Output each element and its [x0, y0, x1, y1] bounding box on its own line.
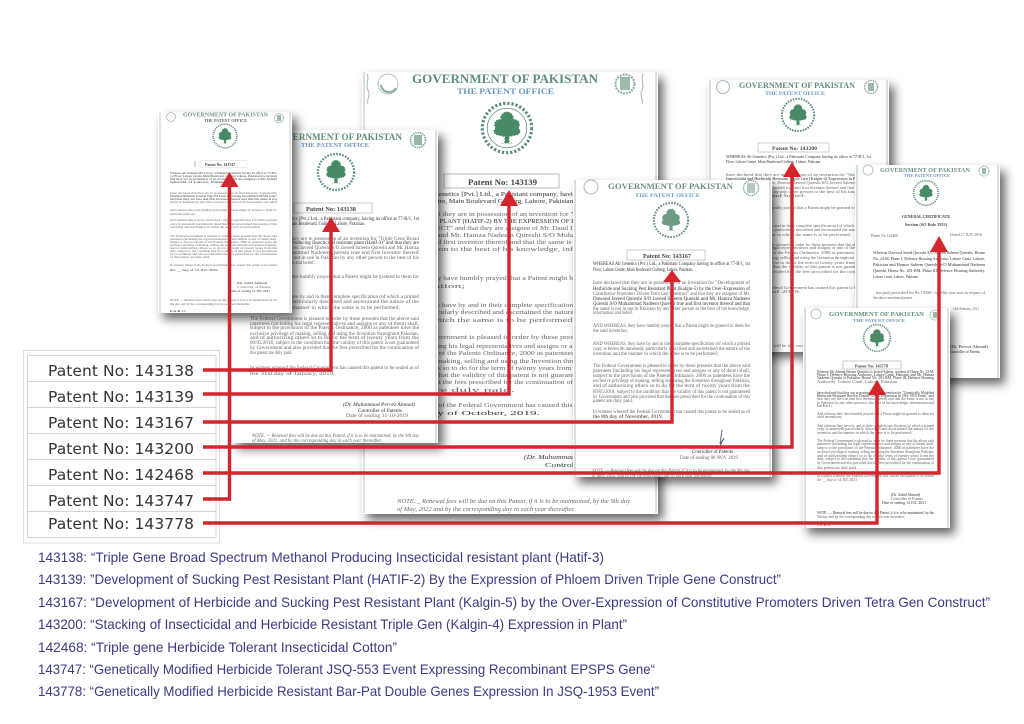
patent document 142468	[855, 165, 1000, 378]
patent number box: Patent No: 143167	[643, 254, 691, 260]
body text: PEST RESISTANT PLANT (HATIF-2) BY THE EXPRESSION OF PHLOEM DRIVEN TRIPLE	[385, 218, 650, 225]
crest and shield ornaments	[863, 165, 989, 176]
title: 143138: 143138: “Triple Gene Broad Spectrum Methanol Producing Insecticidal resistant plant (Hatif-3)	[38, 549, 604, 565]
body text	[725, 154, 872, 349]
body text: NOTE. — Renewal fees will be due on this Patent, if it is to be maintained, by the	[817, 511, 934, 516]
body text: have declared that they are in possession of an invention for "Development of	[593, 281, 750, 286]
body text: of May, 2022, and by the corresponding day in each year thereafter.	[252, 439, 382, 444]
arrow: 143747 to document	[203, 172, 238, 499]
body text: 14th February, 2021	[953, 306, 979, 312]
body text: Whereas Mr. Ahmad Saleem Qureshi s/o Javeed Saleem, resident of House No. 24-M,	[817, 370, 934, 375]
body text: of May, 2022 and by the corresponding day in each year thereafter.	[397, 506, 575, 513]
body text: And whereas they have humbly prayed that a Patent might be granted to them for	[170, 208, 278, 212]
title: 143778: 143778: “Genetically Modified Herbicide Resistant Bar-Pat Double Genes Expression In JSQ-1953 Event”	[38, 683, 659, 699]
emblem	[654, 203, 688, 237]
emblem	[482, 103, 532, 153]
body text: is annexed) particularly described and ascertained the nature of the invention and the	[385, 309, 650, 316]
body text: and that the same is not in use in Pakistan by any other person to the best of his	[250, 256, 419, 261]
body text: assignee of Mr. Dawood Javeed Qureshi S/O Javeed Saleem Qureshi and Mr. Hamza	[250, 246, 420, 251]
body text: And whereas they have by and in their complete specification (of which a printed	[250, 295, 420, 300]
body text: Controller of Patents	[545, 462, 626, 469]
body text: by Government and also provided that the fees prescribed for the continuation of	[817, 461, 935, 465]
body text: (Dr. Zahid Ahmad)	[237, 281, 268, 285]
body text: patentees (including his legal representatives and assigns or any of them) shall,	[250, 322, 419, 327]
body text: of this patent are duly paid.	[170, 255, 210, 259]
heading: GOVERNMENT OF PAKISTAN	[739, 81, 855, 90]
arrow: 142468 to document	[203, 236, 948, 473]
body text: the __ day of 14 JUL 2021	[170, 268, 218, 272]
heading: GOVERNMENT OF PAKISTAN	[829, 311, 924, 318]
body text: And whereas they have by and in their complete specification (of which a printed	[817, 424, 934, 428]
body text: also provided that the fees prescribed for the continuation of this patent are duly paid	[385, 379, 651, 386]
title: 142468: 142468: “Triple gene Herbicide Tolerant Insecticidal Cotton”	[38, 639, 397, 655]
body text: patent are duly paid.	[593, 399, 633, 404]
body text: NOTE. — Renewal fees will be due on this Patent, if it is to be maintained, by the 9th day	[591, 469, 751, 474]
certificate heading: GENERAL CERTIFICATE	[902, 214, 950, 219]
body text: in Pakistan by any other person to the best of his knowledge, information and	[817, 401, 934, 406]
arrow: 143200 to document	[203, 162, 801, 447]
body text: Date of sealing 14 JUL 2021	[882, 501, 926, 505]
patent number box: Patent No: 143139	[468, 177, 538, 187]
title: 143167: 143167: “Development of Herbicide and Sucking Pest Resistant Plant (Kalgin-5) by the Over-Expression of Constitutive Promoters Driven Tetra Gen Construct”	[38, 594, 990, 610]
body text: copy is herewith annexed), particularly described and ascertained the nature of the	[726, 227, 871, 233]
body text: subject to the provisions of the Patents Ordinance, 2000 as patentees have the	[593, 374, 750, 379]
body text	[385, 191, 651, 513]
body text: Dawood Javeed Qureshi S/O Javeed Saleem Qureshi and Mr. Hamza Nadeem	[593, 297, 750, 302]
body text: And whereas they have by and in their complete specification (of which a printed	[170, 218, 277, 222]
body text: Lahore Cantt, Lahore, Pakistan	[873, 274, 919, 280]
title: 143747: 143747: “Genetically Modified Herbicide Tolerant JSQ-553 Event Expressing Recombinant EPSPS Gene“	[38, 661, 655, 677]
body text: information and belief.	[593, 311, 633, 316]
body text: invention and the manner in which the same is to be performed;	[726, 232, 851, 237]
title: 143139: 143139: ”Development of Sucking Pest Resistant Plant (HATIF-2) By the Expression of Phloem Driven Triple Gene Construct”	[38, 571, 781, 587]
body text: WHEREAS Ali Genetics [Pvt.] Ltd., a Pakistani company, having its office at 77-B/1, 1st	[385, 191, 650, 198]
body text: and privilege of making, selling and using the Invention throughout Pakistan, and of	[385, 358, 651, 365]
body text: P.A.R.11	[817, 523, 831, 527]
body text: And whereas they have humbly prayed that a Patent might be granted to them for	[250, 275, 419, 280]
body text: WHEREAS Ali Genetics (Pvt.) Ltd., a Pakistani Company having its office at 77-B/1, 1st	[593, 262, 751, 267]
body text: by Government and also provided that the fees prescribed for the continuation of this	[593, 395, 750, 400]
body text: Floor, Lahore Centre, Main Boulevard, Gulberg, Lahore, Pakistan.	[250, 222, 365, 227]
body text: and that they are true and first inventor thereof and that the same is not	[170, 197, 277, 201]
body text: The Federal Government is pleased to order by these presents that the above said	[250, 317, 420, 322]
body text: Controller of Patents	[692, 450, 733, 455]
body text: The Federal Government is pleased to order by these presents that the above said	[385, 334, 651, 341]
certificate heading	[902, 214, 950, 227]
body text: In witness whereof the Federal Government has caused this patent to be sealed	[170, 263, 277, 267]
body text: to the condition that the validity of this patent is not guaranteed by Government and	[385, 372, 651, 379]
body text: patentees (including his legal representatives and assigns or any of them) shall,	[593, 369, 750, 374]
body text: have declared that they are in possession of an invention for "Genetically Modified	[817, 391, 934, 395]
body text: Controller of Patents	[358, 409, 402, 414]
body text: the above-mentioned patent.	[873, 295, 913, 300]
body text: any other person to the best of his knowledge, information and belief.	[385, 246, 650, 253]
crest and shield ornaments	[716, 80, 878, 94]
body text: The Federal Government is pleased to order by these presents that the above said	[817, 439, 934, 443]
body text: have declared that they are in possession of an invention for "Development of Sucking	[385, 211, 651, 218]
emblem	[914, 181, 938, 205]
patent number table	[24, 350, 220, 543]
body text: In witness whereof the Federal Government has caused this patent to be sealed as of	[250, 366, 419, 371]
office name: THE PATENT OFFICE	[457, 87, 554, 96]
table row: 143167: Patent No: 143167	[48, 414, 194, 432]
emblem	[213, 124, 237, 148]
body text: AND WHEREAS, they have humbly prayed that a Patent might be granted to them for	[593, 324, 750, 329]
patent number box	[758, 143, 829, 152]
body text: date, subject to the condition that the validity of this patent is not guaranteed	[817, 457, 934, 462]
body text: And whereas they have humbly prayed that a Patent might be granted to them for	[817, 412, 935, 416]
table row: 142468: Patent No: 142468	[48, 466, 194, 484]
body text: Floor, Lahore Centre, Main Boulevard Gulberg, Lahore, Pakistan.	[726, 159, 821, 165]
body text: authorizing others so to do for the term of twenty years from the date of filing, subject	[385, 365, 650, 372]
heading: GOVERNMENT OF PAKISTAN	[412, 72, 599, 86]
patent document 143138	[232, 130, 438, 444]
body text: have declared that they are in possession of an invention for "Genetically	[170, 191, 277, 195]
office name: THE PATENT OFFICE	[301, 143, 369, 149]
body text: And whereas they have by and in their complete specification (of which a printed copy	[385, 302, 651, 309]
patent number box	[627, 250, 705, 260]
heading: GOVERNMENT OF PAKISTAN	[183, 112, 269, 118]
table row: 143747: Patent No: 143747	[48, 492, 194, 510]
body text: And whereas they have humbly prayed that a Patent might be granted to them for	[726, 205, 872, 210]
body text	[170, 171, 278, 313]
body text: exclusive privilege of making, selling and using the Invention throughout Pakistan,	[726, 255, 871, 261]
body text: the same is not in use in Pakistan by any other person to the best of his knowledge,	[593, 307, 750, 312]
body text: and of authorizing others so to do for the term of twenty years from the date	[726, 260, 871, 265]
body text: patentees (including his legal representatives and assigns or any of them) shall,	[726, 245, 871, 251]
table row: 143138: Patent No: 143138	[48, 362, 194, 380]
body text: the said invention;	[593, 329, 628, 334]
heading: GOVERNMENT OF PAKISTAN	[272, 132, 402, 142]
body text: In witness whereof the Federal Government has caused this patent to be sealed	[726, 285, 872, 290]
body text: and of authorizing others so to do for the term of twenty years from the	[817, 454, 934, 458]
body text: 09/05/2018, subject to the condition that the validity of this patent is not guaranteed	[250, 341, 420, 346]
body text: the 8th day of November, 2019.	[593, 415, 663, 420]
body text: the __ day of 14 JUL 2021	[817, 478, 857, 482]
body text: Nadeem S/O Muhammad Nadeem Qureshi true and first inventor thereof	[250, 251, 419, 256]
body text: that they are the true and first inventor thereof and that the same is not in use	[817, 397, 934, 401]
body text: Saleem Qureshi and Mr. Hamza Nadeem Qureshi S/O Muhammad Nadeem Qureshi	[385, 232, 650, 239]
body text: 09/05/2018, subject to the condition that the validity of this patent is not guaranteed	[593, 390, 751, 395]
body text: invention and the manner in which the same is to be performed;	[250, 306, 400, 311]
body text: (Dr. Muhammad Pervez Ahmad)	[343, 403, 415, 408]
body text: Pakistan and Hamza Saleem Qureshi S/O Muhammad Nadeem	[873, 262, 986, 267]
body text: (Dr. Zahid Ahmad)	[891, 493, 921, 497]
body text: 1st Floor, Lahore Centre, Main Boulevard, Gulberg, Lahore, Pakistan have declared	[170, 174, 277, 179]
body text: of May, 2022, and by the corresponding day in each year thereafter.	[592, 474, 712, 479]
body text: The Federal Government is pleased to order by these presents that the above said	[170, 234, 277, 238]
arrow: 143778 to document	[203, 380, 886, 523]
body text: said invention;	[385, 283, 465, 290]
body text: And whereas they have humbly prayed that a Patent might be granted to them for the	[385, 275, 650, 282]
body text: the 8th day of October, 2019.	[385, 410, 541, 417]
heading: GOVERNMENT OF PAKISTAN	[880, 167, 971, 174]
body text: information and belief.	[726, 193, 806, 198]
body text: that they are assignee of Mr. Dawood Javeed Qureshi S/O Javeed Saleem Qureshi	[726, 180, 872, 185]
office name: THE PATENT OFFICE	[765, 91, 826, 97]
body text: WHEREAS Ali Genetics (Pvt.) Ltd., a Pakistani company, having its office at 77-B/1, 1st	[250, 217, 420, 222]
body text: exclusive privilege of making, selling and using the Invention throughout Pakistan,	[817, 450, 934, 455]
patent number box: Patent No: 143747	[205, 162, 235, 167]
office name: THE PATENT OFFICE	[904, 173, 950, 178]
body text: this patent are duly paid.	[817, 466, 857, 470]
body text: Nadeem Qureshi of Pakistan, House No. 281-RM, Phase III, Defence Housing	[817, 376, 934, 381]
patent number box	[843, 361, 901, 369]
body text: subject to the condition that the validity of this patent is not guaranteed by	[726, 264, 872, 269]
body text: Controller of Patents	[950, 349, 980, 354]
patent document 143200	[708, 80, 889, 352]
body text	[873, 250, 989, 354]
body text	[250, 217, 420, 444]
body text: Have declared that they are in possession of an invention for "Triple Gene Broad	[250, 237, 420, 242]
patent number box	[195, 160, 247, 168]
body text: copy is annexed) particularly described and ascertained the nature of the	[250, 300, 420, 305]
office name: THE PATENT OFFICE	[853, 318, 905, 323]
body text: Modified Herbicide Tolerant JSQ-553 Event Expressing Recombinant EPSPS Gene"	[170, 194, 278, 198]
body text: exclusive privilege of making, selling and using the Invention throughout Pakistan,	[593, 379, 750, 384]
emblem	[318, 154, 354, 190]
body text: NOTE. — Renewal fees will be due on this Patent, if it is to be maintained, by the 9th day	[251, 434, 420, 439]
table row: 143139: Patent No: 143139	[48, 388, 194, 406]
body text: invention and the manner in which the same is to be performed;	[817, 431, 912, 435]
body text: Herbicide and Sucking Pest Resistant Plant (Kalgin-5) by the Over-Expression of	[593, 287, 750, 292]
body text: exclusive privilege of making, selling and using the Invention throughout Pakistan,	[170, 243, 277, 248]
body text: Floor, Lahore Centre, Main Boulevard Gulberg, Lahore, Pakistan.	[593, 268, 693, 273]
body text: this patent are duly paid.	[250, 351, 292, 356]
body text: subject to the provisions of the Patents Ordinance, 2000 as patentees have the	[170, 240, 277, 245]
body text: invention and the manner in which the same is to be performed;	[593, 352, 718, 357]
body text: (Dr. Pervez Ahmad)	[950, 344, 989, 349]
body text: have declared that they are in possession of an invention for "Stacking of	[726, 172, 872, 177]
patent title list	[38, 549, 990, 699]
body text: Controller of Patents	[891, 497, 924, 501]
emblem	[864, 325, 890, 351]
body text: Qureshi S/O Muhammad Nadeem Qureshi true and first inventor thereof and that	[593, 302, 751, 307]
body text: The Federal Government is pleased to order by these presents that the above said	[593, 364, 751, 369]
body text: by Government and also provided that the fees prescribed for the continuation	[170, 252, 277, 256]
heading: GOVERNMENT OF PAKISTAN	[608, 181, 734, 191]
body text: said invention;	[170, 212, 195, 216]
body text: patentees (including his legal representatives and assigns or any of them) shall,	[170, 237, 277, 242]
patent number line: Patent No 142468	[871, 233, 899, 238]
body text: the 31st day of January, 2019.	[250, 372, 335, 377]
body text: Herbicide Resistant Bar-Pat Double Genes Expression In JSQ-1953 Event" and	[817, 394, 934, 398]
body text: patentees (including his legal representatives and assigns or any of them) shall, subject	[385, 343, 650, 350]
body text: NOTE. _ Renewal fees will be due on this Patent, if it is to be maintained, by the 9th day	[396, 498, 630, 505]
body text: invention and the manner in which the same is to be performed;	[170, 225, 260, 229]
body text: Controller of Patents	[237, 285, 272, 289]
patent document 143139	[362, 72, 658, 514]
patent number box: Patent No: 143138	[306, 206, 356, 213]
patent number line	[871, 232, 983, 238]
certificate heading: Section (SO Rule 1933)	[905, 222, 948, 227]
body text: subject to the provisions of the Patents Ordinance, 2000 as patentees have the	[726, 250, 871, 256]
body text: In witness whereof the Federal Government has caused this patent to be sealed as of	[593, 410, 750, 415]
body text: AND WHEREAS, they have by and in their complete specification (of which a printed	[593, 342, 751, 347]
body text	[817, 370, 935, 527]
patent number line: Dated 27 JUN 2016	[950, 232, 983, 237]
table row: 143778: Patent No: 143778	[48, 515, 194, 533]
crest and shield ornaments	[811, 309, 940, 320]
body text: subject to the provisions of the Patents Ordinance, 2000 as patentees have the	[250, 326, 420, 331]
body text: The Federal Government is pleased to order by these presents that the above said	[726, 242, 872, 247]
body text: said invention;	[817, 415, 842, 419]
body text: their first true and first inventor thereof and that the same is not in use in Pakistan by	[385, 239, 651, 246]
body text: copy is herewith annexed), particularly described and ascertained the nature of the	[593, 347, 750, 352]
body text: Qureshi, House No. 281-RM, Phase III, Defence Housing Authority,	[873, 268, 985, 274]
body text: as of the day of 2019.	[726, 289, 801, 294]
table row: 143200: Patent No: 143200	[48, 440, 194, 458]
body text: No. 24-M, Phase I, Defence Housing Authority, Lahore Cantt, Lahore,	[873, 256, 985, 262]
body text: to the provisions of the Patents Ordinance, 2000 as patentees have the exclusive right	[385, 350, 650, 357]
body text: Constitutive Promoters Driven Tetra Gen Construct" and that they are assignee of Mr.	[593, 292, 750, 297]
body text: Phase I, Defence Housing Authority, Lahore Cantt, Pakistan, and Mr. Hamza	[817, 373, 934, 378]
body text: manner in which the same is to be performed.	[385, 317, 576, 324]
body text: exclusive privilege of making, selling and using the Invention throughout Pakistan,	[250, 332, 419, 337]
emblem	[782, 99, 814, 131]
body text: and of authorizing others so to do for the term of twenty years from the	[593, 384, 750, 389]
body text: Whereas Dawood Javed Qureshi S/O Javeed Saleem Qureshi, House	[873, 250, 985, 256]
body text: patent are duly paid.	[385, 387, 516, 394]
patent document 143747	[158, 112, 292, 313]
body text: that they are in possession of an invention and are assignee of Mr. Ahmad	[170, 177, 277, 181]
arrow: 143138 to document	[203, 217, 340, 370]
body text: Date of sealing 31-10-2019	[346, 414, 409, 419]
body text: knowledge, information and belief;	[250, 261, 315, 266]
body text: is not in use in Pakistan by any other person to the best of his knowledge,	[726, 189, 871, 195]
body text: belief;	[817, 404, 832, 408]
body text: Whereas Ali Genetics (Pvt.) Ltd., a Pakistani company having its office at 77-B/1,	[170, 171, 277, 176]
body text: patentees (including his legal representatives and assigns or any of them) shall,	[817, 442, 934, 447]
body text: and of authorizing others so to do for the term of twenty years from the	[250, 336, 420, 341]
shield ornament	[410, 132, 426, 148]
body text: NOTE. — Renewal fees will be due on this Patent, if it is to be maintained, by the	[170, 298, 277, 303]
title: 143200: 143200: “Stacking of Insecticidal and Herbicide Resistant Triple Gen (Kalgin-4) Expression in Plant”	[38, 616, 627, 632]
crest and shield ornaments	[584, 180, 758, 196]
body text: and Mr. Hamza Nadeem Qureshi true and first inventor thereof and that the same	[726, 185, 871, 190]
body text: In witness whereof the Federal Government has caused this patent to be sealed	[817, 474, 934, 478]
body text: copy is annexed) particularly described and ascertained the nature of the	[817, 427, 934, 431]
patent document 143167	[573, 180, 772, 479]
body text	[591, 262, 751, 479]
patent number box: Patent No: 143200	[772, 146, 817, 152]
body text: Insecticidal and Herbicide Resistant Triple Gen (Kalgin-4) Expression in Plant" and	[726, 176, 872, 181]
body text: date, subject to the condition that the validity of this patent is not guaranteed	[170, 249, 277, 254]
patent number box	[294, 203, 372, 213]
crest and shield ornaments	[166, 112, 284, 122]
arrow: 143167 to document	[203, 270, 681, 422]
body text: Government and also provided that the fees prescribed for the continuation	[726, 269, 872, 274]
body text: Spectrum Methanol Producing Insecticidal resistant plant (Hatif-3)" and that they are	[250, 241, 420, 246]
patent number box: Patent No: 143778	[855, 364, 889, 368]
body text: copy is annexed) particularly described and ascertained the nature of the	[170, 222, 277, 226]
body text: Date of sealing 08 NOV 2019	[680, 456, 739, 461]
arrow: 143139 to document	[203, 190, 518, 394]
body text: Floor, Lahore Centre, Main Boulevard Gulberg, Lahore, Pakistan.	[385, 198, 575, 205]
body text: GENE CONSTRUCT" and that they are assignee of Mr. Daud Javeed Qureshi S/O Javeed	[385, 225, 651, 232]
body text: And whereas they have by and in their complete specification (of which a printed	[726, 223, 872, 228]
body text: by Government and also provided that the fees prescribed for the continuation of	[250, 346, 419, 351]
body text: Qureshi of Lahore, Pakistan.	[170, 180, 230, 185]
office name: THE PATENT OFFICE	[204, 119, 248, 123]
body text: in use in Pakistan by any other person to the best of his knowledge and belief	[170, 200, 278, 204]
body text: and of authorizing others so to do for the term of twenty years from the	[170, 246, 277, 250]
body text: 9th day and by the corresponding day in each year thereafter.	[817, 515, 905, 519]
body text: P.A.R.11	[170, 309, 186, 313]
patent number box	[444, 174, 559, 188]
body text: has paid prescribed fee Rs.15000/- for 13th year sum in respect of	[876, 290, 985, 295]
body text: NOTE. — Renewal fees will be due on this Patent, if it is to be maintained	[725, 343, 872, 349]
body text: Authority, Lahore Cantt, Lahore, Pakistan	[817, 380, 897, 385]
crest and shield ornaments	[367, 74, 643, 104]
body text: In witness whereof the Federal Government has caused this patent to be sealed as of	[385, 402, 651, 409]
patent document 143778	[803, 308, 950, 528]
body text: 9th day and by the corresponding day in each year thereafter.	[170, 302, 250, 306]
body text: WHEREAS Ali Genetics (Pvt.) Ltd., a Pakistani Company having its office at 77-B/1, 1st	[726, 154, 872, 160]
body text: (Dr. Muhammad Pervez Ahmad)	[524, 454, 624, 461]
office name: THE PATENT OFFICE	[635, 193, 700, 199]
body text: subject to the provisions of the Patents Ordinance, 2000 as patentees have the	[817, 446, 934, 451]
body text: Date of sealing 14 JUL 2021	[230, 289, 270, 293]
